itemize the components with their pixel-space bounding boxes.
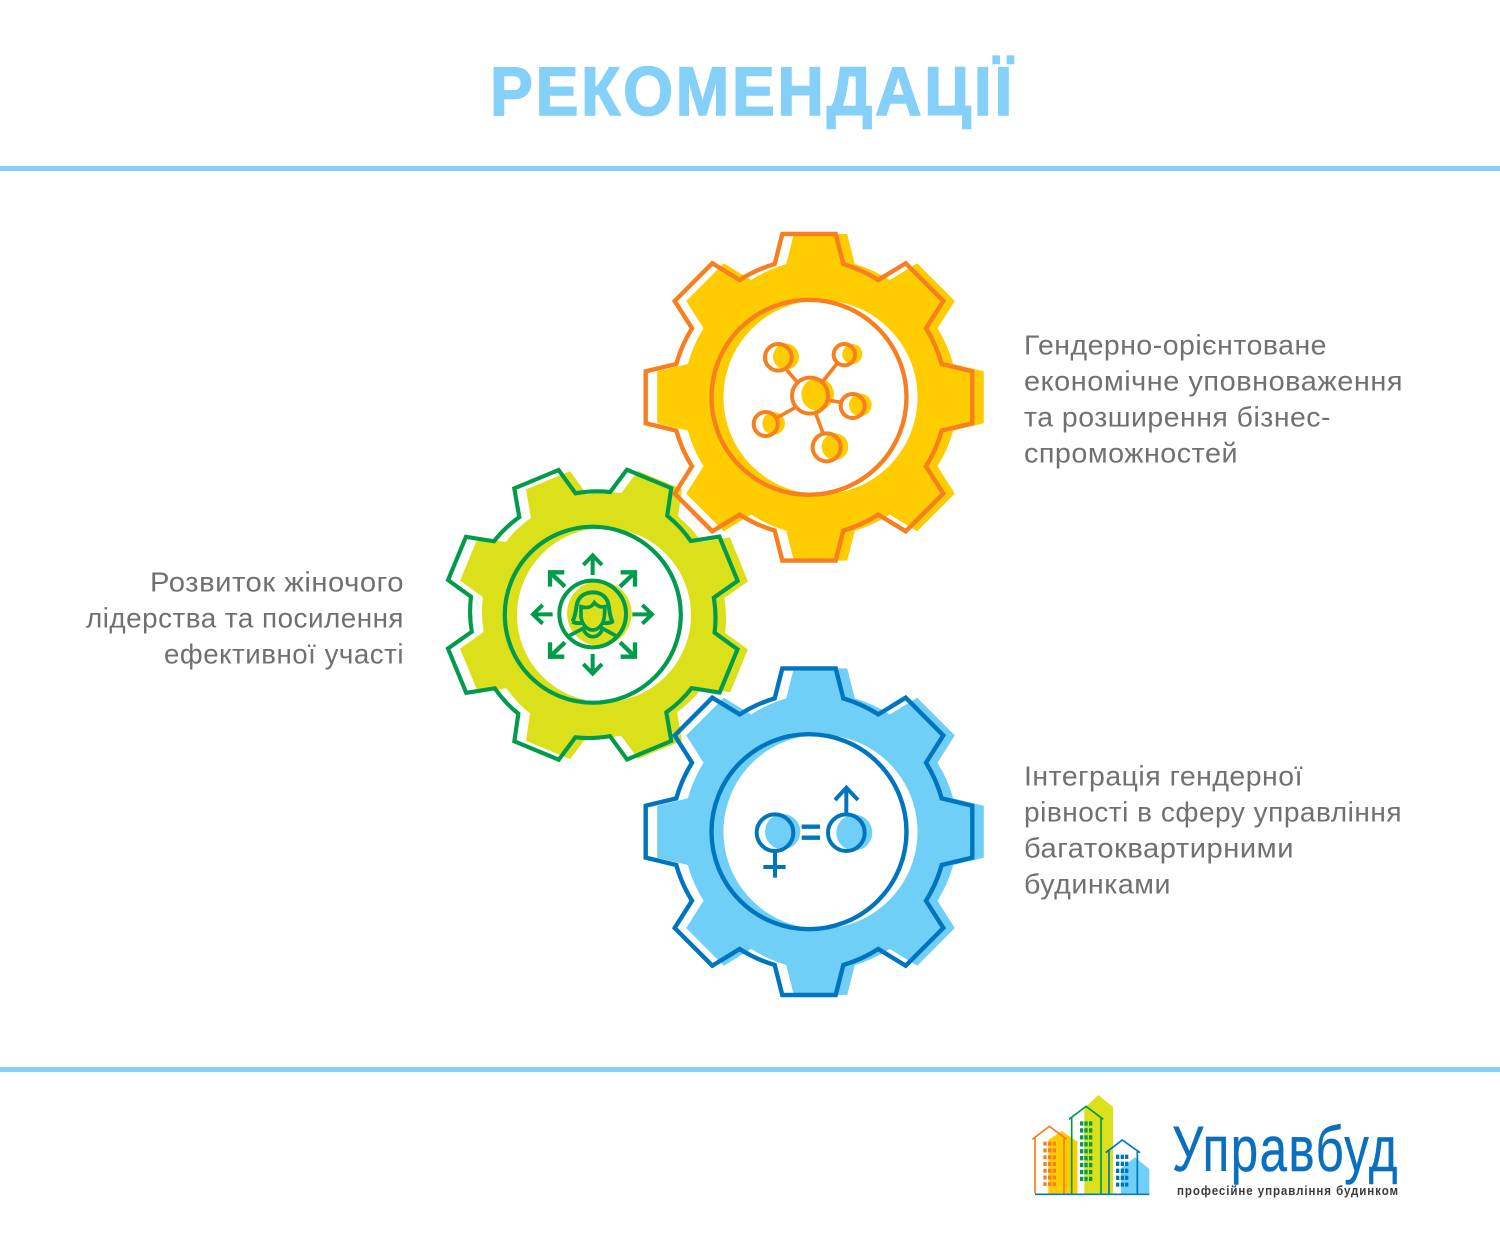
text: economic empowerment: та розширення бізнес- (1024, 402, 1331, 432)
text: women's leadership: ефективної участі (164, 638, 404, 670)
text: women's leadership: лідерства та посилення (86, 602, 404, 634)
icon: gender equality symbols (757, 788, 872, 878)
gear: blue gender equality (646, 668, 984, 995)
icon: network nodes (754, 344, 872, 461)
gear: orange economy (646, 234, 984, 561)
text: women's leadership (86, 566, 404, 670)
text: women's leadership: Розвиток жіночого (150, 566, 404, 598)
text: gender integration (1024, 760, 1402, 900)
text: gender integration: багатоквартирними (1024, 832, 1294, 864)
text: economic empowerment: спроможностей (1024, 438, 1238, 468)
logo tagline: професійне управління будинком (1177, 1184, 1399, 1198)
icon: woman with arrows (533, 555, 652, 674)
title: РЕКОМЕНДАЦІЇ (490, 53, 1015, 130)
text: gender integration: будинками (1024, 868, 1171, 900)
logo icon: buildings (1032, 1095, 1149, 1194)
text: gender integration: рівності в сферу управління (1024, 796, 1402, 828)
logo (1032, 1095, 1399, 1198)
text: economic empowerment: економічне уповноваження (1024, 366, 1403, 396)
logo name: Управбуд (1172, 1113, 1399, 1185)
gear: green leadership (401, 423, 795, 807)
text: economic empowerment: Гендерно-орієнтоване (1024, 330, 1327, 360)
text: economic empowerment (1024, 330, 1403, 468)
text: gender integration: Інтеграція гендерної (1024, 760, 1303, 792)
